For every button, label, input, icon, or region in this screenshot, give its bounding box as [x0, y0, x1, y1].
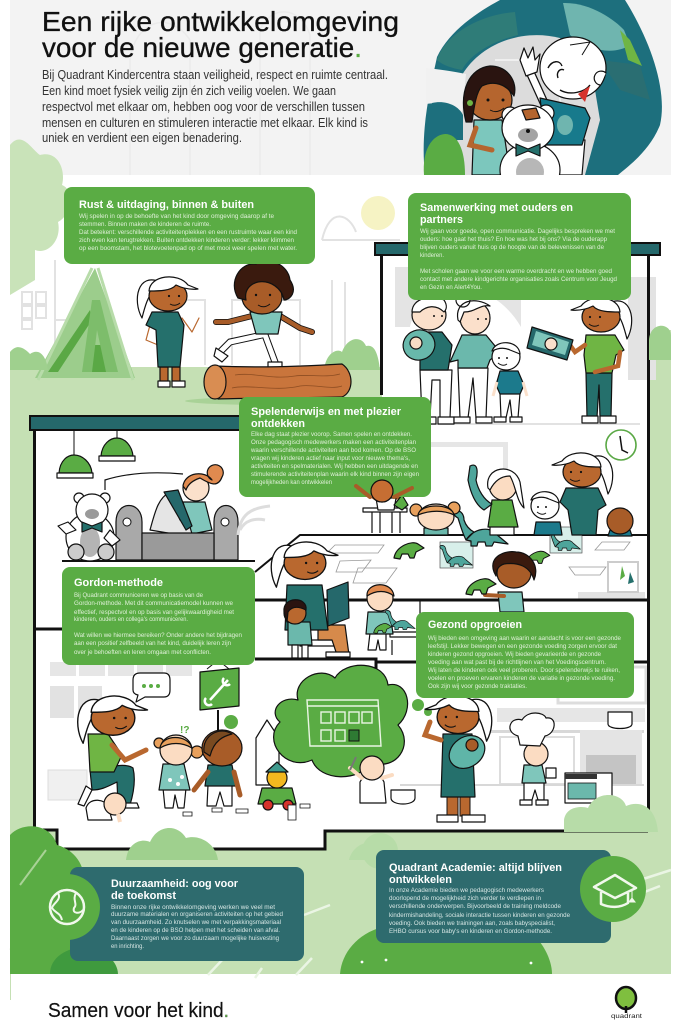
- bushes and trees at bottom: [10, 326, 671, 974]
- table surface with toys and papers: [327, 511, 638, 592]
- panel: Samenwerking met ouders en partners: blijven ouders vanuit huis op de hoogte van de belevenissen van de: [420, 244, 604, 251]
- chef boy: [510, 713, 556, 805]
- baby in high chair: [356, 480, 414, 533]
- teddy bear: [58, 493, 120, 561]
- panel: Samenwerking met ouders en partners: ouders: hoe gaat het thuis? En hoe was het bij ons? Via de ouderapp: [420, 236, 607, 243]
- panel: Spelenderwijs en met plezier ontdekken: Onze pedagogisch medewerkers maken een activiteitenplan: [251, 439, 416, 446]
- panel: Rust en uitdaging: [64, 187, 315, 264]
- plant behind sofa: [238, 506, 270, 535]
- wall clock: [606, 430, 636, 460]
- toy castle: [256, 720, 279, 785]
- panel: Quadrant Academie: doorlopend de mogelijkheid zich verder te verdiepen in: [389, 895, 541, 902]
- panel: Duurzaamheid: van duurzaamheid. Zo knutselen we met verpakkingsmateriaal: [111, 919, 281, 926]
- icon: graduation cap: [580, 856, 646, 922]
- header intro text: respectvol met elkaar om, hebben oog voor de verschillen tussen: [42, 100, 365, 114]
- panel: Duurzaamheid: [70, 867, 304, 961]
- header title: voor de nieuwe generatie.: [42, 32, 362, 63]
- panel: Quadrant Academie: voeding. Ook bieden we trainingen aan, zoals babyspecialist,: [389, 920, 555, 927]
- panel: Spelenderwijs en met plezier ontdekken: waarin verschillende activiteiten aan bod komen. Op de BSO: [250, 447, 416, 454]
- girl with hair buns at table: [410, 502, 460, 535]
- woman with tablet: [527, 298, 632, 423]
- header intro text: Bij Quadrant Kindercentra staan veiligheid, respect en ruimte centraal.: [42, 68, 388, 82]
- scattered toy blocks: [183, 804, 310, 820]
- panel: Gezond opgroeien: voelen en proeven ervaren kinderen de variatie in gezonde voeding.: [428, 675, 615, 682]
- panel: Gordon-methode: [62, 567, 255, 665]
- panel: Duurzaamheid: de toekomst: [111, 890, 176, 902]
- header title: Een rijke ontwikkelomgeving: [42, 6, 399, 37]
- panel: Gezond opgroeien: Wij bieden een omgeving aan waarin er aandacht is voor een gezonde: [428, 635, 621, 642]
- toy gnome: [258, 762, 296, 810]
- panel: Gordon-methode: Wat willen we hiermee bereiken? Onder andere het bijdragen: [74, 632, 242, 639]
- woman reading book with girl: [271, 542, 350, 658]
- panel: Gezond opgroeien: Ook zijn wij voor gezonde traktaties.: [428, 683, 527, 690]
- bushes in garden: [10, 339, 380, 370]
- baby head overlapping panel: [356, 480, 412, 502]
- panel: Rust en uitdaging: Rust & uitdaging, binnen & buiten: [79, 199, 254, 211]
- white haired boy at table: [531, 492, 562, 535]
- play tent: [35, 268, 135, 380]
- panel: Gezond opgroeien: [416, 612, 634, 698]
- woman kneeling: [78, 696, 148, 808]
- young boy with blue shirt: [492, 343, 527, 422]
- quadrant logo: quadrant: [611, 1013, 642, 1020]
- panel: Spelenderwijs en met plezier ontdekken: Spelenderwijs en met plezier: [251, 406, 402, 418]
- panel: Spelenderwijs en met plezier ontdekken: [239, 397, 431, 497]
- panel: Gordon-methode: Bij Quadrant communiceren we op basis van de: [74, 592, 203, 599]
- panel: Gordon-methode: kinderen, ouders en collega's communiceren.: [74, 616, 188, 623]
- panel: Rust en uitdaging: Wij spelen in op de behoefte van het kind door omgeving daarop af te: [79, 213, 274, 220]
- panel: Duurzaamheid: Daarnaast zorgen we voor zo duurzaam mogelijke huisvesting: [111, 935, 279, 942]
- scene mask below header: [425, 175, 665, 200]
- boy holding hands: [194, 730, 242, 806]
- girl with buns holding block: [154, 725, 203, 808]
- panel: Rust en uitdaging: zich even kan terugtrekken. Buiten ontdekken kinderen verder: lekker klimmen: [79, 237, 294, 244]
- panel: Rust en uitdaging: Dat betekent: verschillende activiteitenplekken en een rustruimte waar een kind: [79, 229, 297, 236]
- house interior: [35, 250, 648, 849]
- grandmother: [450, 293, 500, 423]
- grey background details in rooms: [48, 267, 656, 800]
- panel: Quadrant Academie: EHBO cursus voor baby's en kinderen en Gordon-methode.: [389, 928, 552, 935]
- panel: Spelenderwijs en met plezier ontdekken: stimulerende activiteitenplan waarin elk kind binnen zijn eigen: [251, 471, 419, 478]
- bottom ground lines: [10, 870, 671, 978]
- panel: Duurzaamheid: en de kinderen op de BSO helpen met het scheiden van afval.: [111, 927, 280, 934]
- grandparent holding baby: [399, 297, 454, 424]
- panel: Gezond opgroeien: Gezond opgroeien: [428, 619, 522, 631]
- sign with wrench: [200, 660, 239, 738]
- speech bubble: [133, 673, 170, 702]
- woman with teal dress: [137, 277, 199, 387]
- panel: Samenwerking met ouders en partners: [408, 193, 631, 300]
- panel: Quadrant Academie: verschillende onderwerpen. Bijvoorbeeld de training meldcode: [389, 903, 561, 910]
- panel: Duurzaamheid: Duurzaamheid: oog voor: [111, 878, 239, 890]
- panel: Samenwerking met ouders en partners: contact met andere kindgerichte organisaties zoals Centrum voor Jeugd: [420, 276, 617, 283]
- tree log: [185, 364, 375, 405]
- panel: Rust en uitdaging: stemmen. Binnen maken de kinderen de ruimte.: [79, 221, 211, 228]
- hanging lamps: [57, 430, 135, 478]
- hero illustration: [424, 0, 662, 197]
- panel: Gezond opgroeien: voeding aan wat past bij de richtlijnen van het Voedingscentrum.: [428, 659, 606, 666]
- toy oven: [565, 773, 612, 803]
- panel: Gezond opgroeien: Wij laten de kinderen ook veel proberen. Door spelenderwijs te ruiken,: [428, 667, 620, 674]
- header intro text: [42, 68, 388, 145]
- panel: Duurzaamheid: duurzame materialen en organiseren activiteiten op het gebied: [111, 911, 283, 918]
- header intro text: Een kind moet fysiek veilig zijn én zich veilig voelen. We gaan: [42, 84, 336, 98]
- panel: Quadrant Academie: Quadrant Academie: altijd blijven: [389, 862, 562, 874]
- panel: Gordon-methode: over je behoeften en leren omgaan met conflicten.: [74, 649, 211, 656]
- panel: Duurzaamheid: Binnen onze rijke ontwikkelomgeving werken we veel met: [111, 904, 275, 911]
- panel: Gezond opgroeien: leefstijl. Lekker bewegen en een gezonde voeding zorgen ervoor dat: [428, 643, 617, 650]
- woman carrying baby: [425, 696, 492, 822]
- boy with orange hair on chair: [366, 585, 428, 655]
- panel: Quadrant Academie: ontwikkelen: [389, 874, 452, 886]
- panel: Rust en uitdaging: op een boomstam, het blotevoetenpad op of met mooi weer spelen met water.: [79, 245, 297, 252]
- tree top left: [10, 140, 70, 295]
- header intro text: uniek en verdient een eigen benadering.: [42, 131, 242, 145]
- hero: teddy bear: [500, 105, 560, 197]
- panel: Samenwerking met ouders en partners: Met scholen gaan we voor een warme overdracht en we hebben goed: [420, 268, 612, 275]
- header band: [10, 0, 671, 175]
- panel: Samenwerking met ouders en partners: Samenwerking met ouders en: [420, 202, 573, 214]
- panel: Gordon-methode: Gordon-methode: [74, 577, 163, 589]
- grandmother holding dinosaur: [468, 465, 524, 535]
- panel: Gezond opgroeien: kinderen gezond opgroeien. Wij bieden gevarieerde en gezonde: [428, 651, 601, 658]
- panel: Spelenderwijs en met plezier ontdekken: activiteiten en spelmaterialen. Wij hebben een uitdagende en: [251, 463, 418, 470]
- boy balancing on log: [214, 261, 312, 368]
- crawling baby: [86, 793, 126, 822]
- quadrant logo: [611, 987, 642, 1020]
- woman reading on sofa: [105, 465, 223, 535]
- scene background: garden and ground: [10, 196, 671, 974]
- boy with curly hair and dinosaur: [466, 551, 550, 612]
- header title: [42, 6, 399, 63]
- grey sofa: [116, 506, 238, 560]
- girl with buns holding block: !?: [180, 725, 189, 736]
- panel: Gordon-methode: aan een positief zelfbeeld van het kind, duidelijk leren zijn: [74, 640, 231, 647]
- panel: Quadrant Academie: kindermishandeling, sociale interactie tussen kinderen en gezonde: [389, 912, 570, 919]
- panel: Spelenderwijs en met plezier ontdekken: mogelijkheden kan ontwikkelen: [251, 479, 332, 486]
- panel: Spelenderwijs en met plezier ontdekken: vragen wij kinderen actief naar input voor nieuwe thema's,: [251, 455, 410, 462]
- footer edge lines: [10, 974, 12, 1000]
- woman with clock: [552, 453, 613, 535]
- building walls and floors: [30, 243, 660, 849]
- panel: Gordon-methode: Gordon-methode. Met dit communicatiemodel kunnen we: [74, 600, 233, 607]
- panel: Gordon-methode: effectief, respectvol en op basis van gelijkwaardigheid met: [74, 609, 234, 616]
- child looking sideways: [607, 508, 633, 536]
- green thought cloud with planner: [274, 665, 432, 777]
- panel: Duurzaamheid: en inrichting.: [111, 943, 144, 950]
- panel: Spelenderwijs en met plezier ontdekken: Elke dag staat plezier voorop. Samen spelen en ontdekken.: [251, 431, 412, 438]
- icon: globe: [34, 874, 100, 940]
- panel: Quadrant Academie: In onze Academie bieden we pedagogisch medewerkers: [389, 887, 544, 894]
- hero: boy waving: [520, 37, 606, 175]
- panel: Samenwerking met ouders en partners: Wij gaan voor goede, open communicatie. Dagelijks bespreken we met: [420, 228, 615, 235]
- panel: Spelenderwijs en met plezier ontdekken: ontdekken: [251, 418, 305, 430]
- panel: Quadrant Academie: [376, 850, 611, 943]
- header intro text: mensen en culturen en stimuleren interactie met elkaar. Elk kind is: [42, 116, 368, 130]
- panel: Samenwerking met ouders en partners: kinderen.: [420, 252, 444, 259]
- hero: girl: [463, 66, 515, 175]
- panel: Samenwerking met ouders en partners: en Gezin en Alert4You.: [420, 284, 482, 291]
- baby with spatula and pot: [350, 756, 415, 804]
- panel: Samenwerking met ouders en partners: partners: [420, 214, 463, 226]
